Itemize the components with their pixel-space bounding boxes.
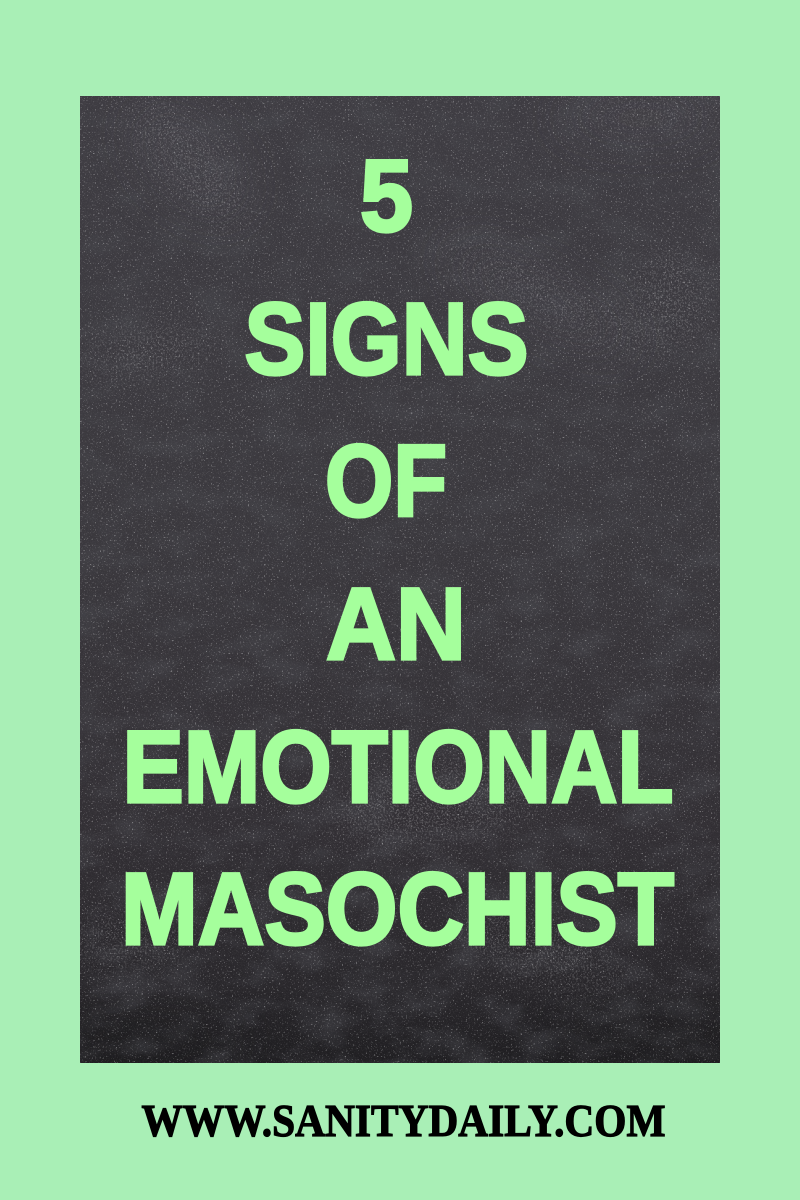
title line: EMOTIONAL: EMOTIONAL (122, 710, 674, 824)
website url footer: WWW.SANITYDAILY.COM (142, 1095, 666, 1146)
title line: OF: OF (325, 424, 447, 538)
panel: chalkboard (80, 96, 720, 1063)
title line: SIGNS: SIGNS (244, 282, 528, 396)
title line: AN: AN (326, 567, 466, 681)
title line: 5: 5 (360, 139, 413, 253)
title (121, 139, 674, 966)
title line: MASOCHIST: MASOCHIST (121, 852, 674, 966)
